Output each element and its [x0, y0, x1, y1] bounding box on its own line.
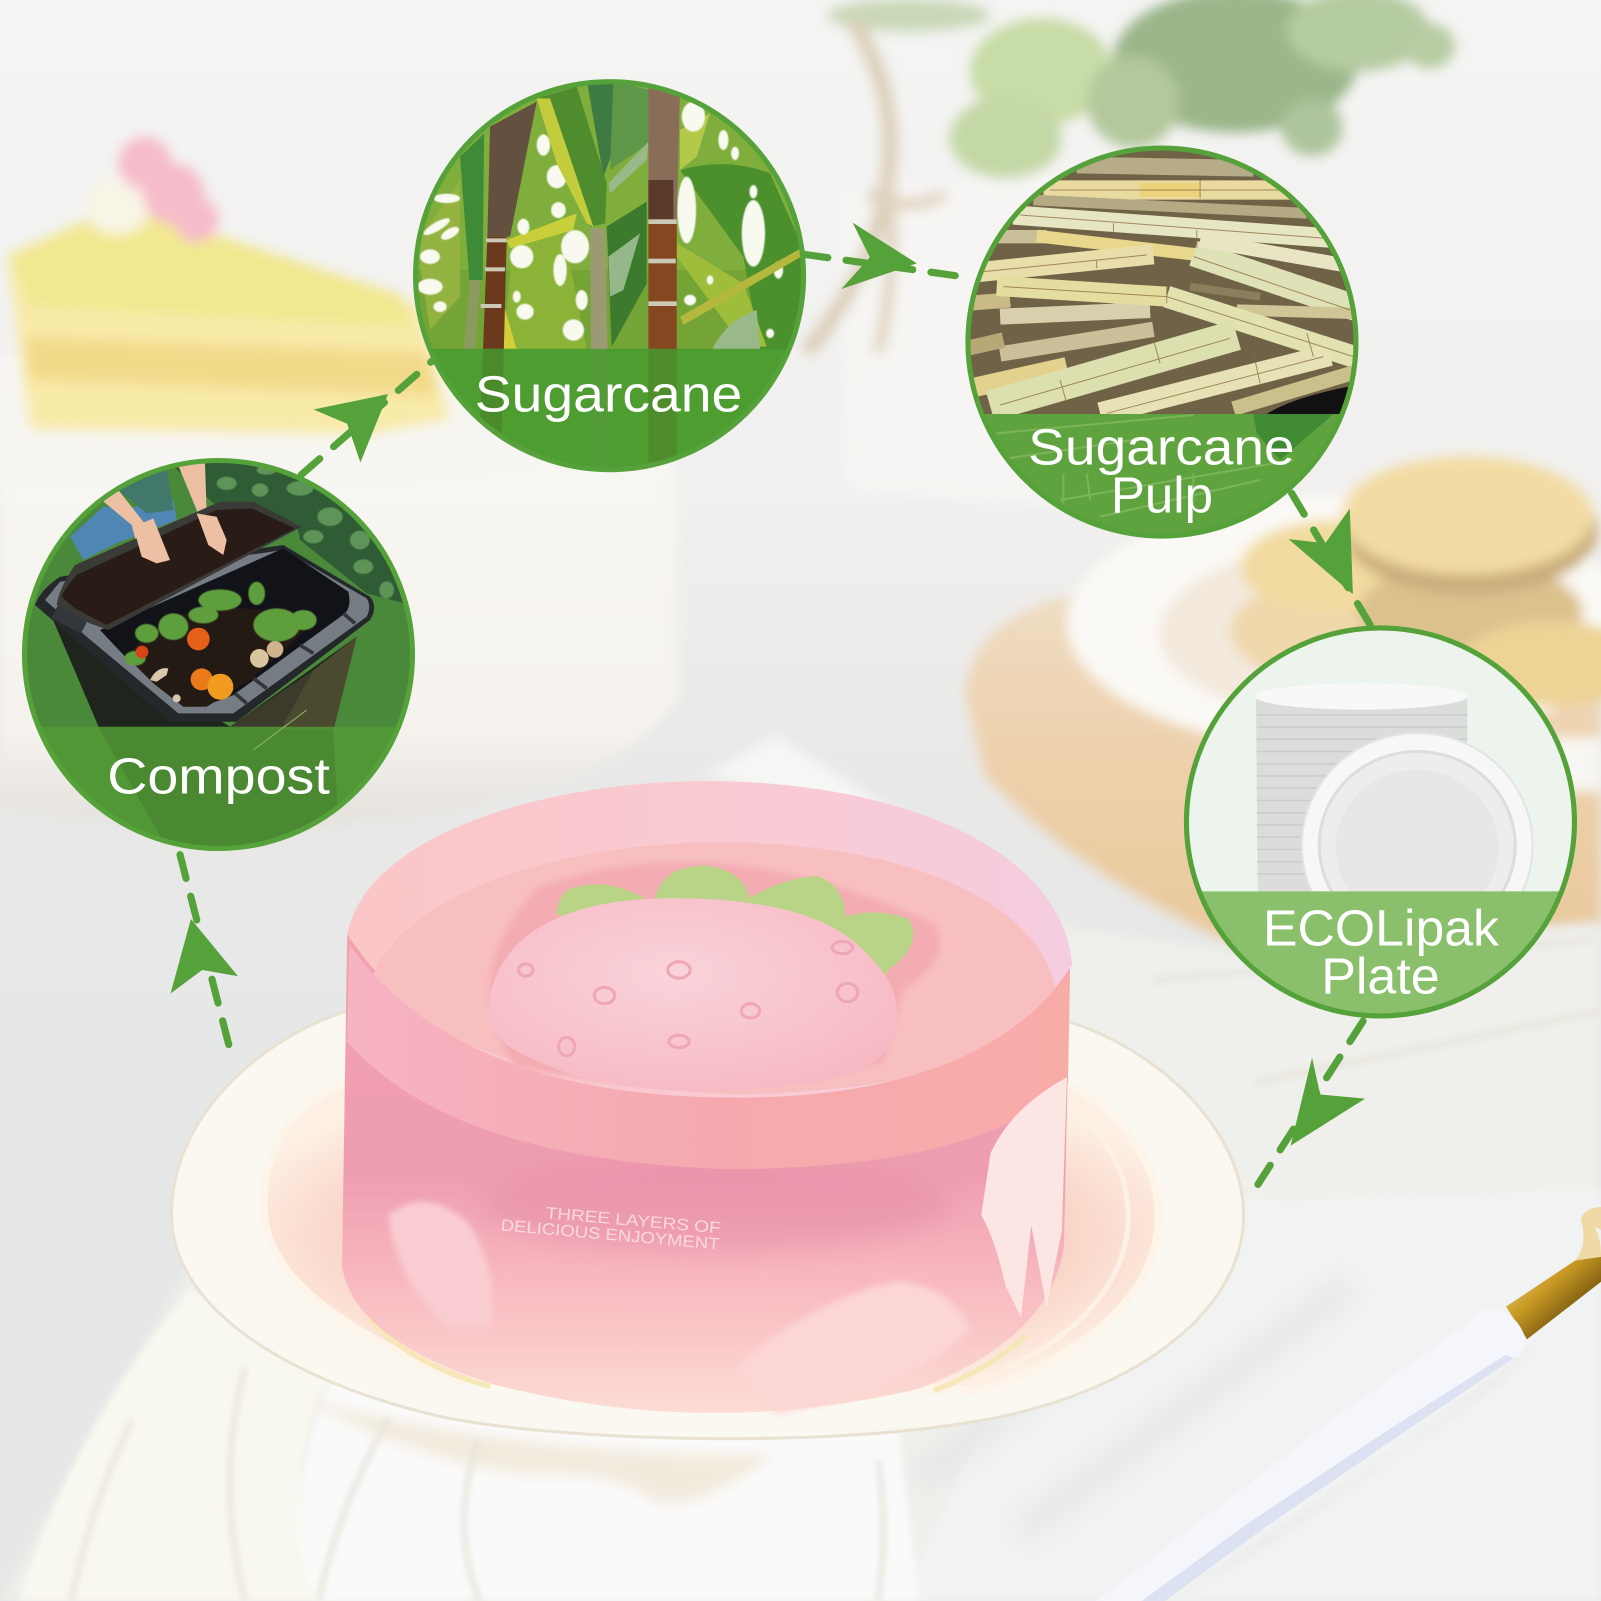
panel: sugarcane — [407, 67, 817, 482]
strawberry leaves — [556, 866, 913, 988]
wrap: cloud prints — [388, 1202, 493, 1327]
compost: vegetables — [127, 607, 313, 707]
arrow: plate to table — [1258, 1021, 1365, 1184]
background: layered yellow cake slice — [8, 137, 449, 434]
yellow cake edge — [368, 1317, 1026, 1391]
wrap: lower band shading — [347, 944, 1070, 1169]
background: plant and twine — [807, 0, 1455, 511]
background: white cloth and folds — [0, 735, 1601, 1601]
wrap: printed text: DELICIOUS ENJOYMENT — [500, 1216, 720, 1253]
panel: sugarcane pulp: Pulp — [1111, 467, 1213, 524]
strawberry — [488, 898, 897, 1091]
panel: ECOLipak plate: Plate — [1321, 947, 1440, 1004]
wrap: printed text — [500, 1204, 721, 1253]
wrap: inner back rim — [347, 781, 1072, 1108]
compost: tray of soil — [57, 502, 302, 630]
background: wooden board, plate and pancakes — [965, 456, 1601, 950]
panel: ECOLipak plate — [1184, 628, 1578, 1024]
panel: sugarcane pulp — [957, 137, 1367, 547]
arrow: table back to compost — [171, 850, 238, 1045]
panel: compost — [17, 447, 427, 860]
arrow: pulp to plate — [1289, 493, 1370, 625]
sugarcane: label: Sugarcane — [475, 365, 742, 422]
pen: gold nib — [1506, 1255, 1601, 1339]
plate: stack of plates — [1256, 687, 1467, 899]
white pen with gold nib — [1096, 1207, 1601, 1601]
pulp: label band — [984, 414, 1340, 534]
strawberry seeds — [519, 941, 858, 1056]
pulp: fibrous stalks — [967, 165, 1360, 413]
plate: label band — [1202, 891, 1559, 1014]
compost: label: Compost — [107, 747, 330, 804]
compost: label band — [42, 726, 396, 846]
pulp: fibre lines and nodes — [983, 180, 1353, 413]
sugarcane: label band — [432, 348, 786, 468]
sugarcane: left blade and stalks — [460, 133, 484, 280]
plate: label: ECOLipak — [1263, 899, 1499, 956]
pulp: shadowed gaps — [970, 150, 1354, 414]
arrow: sugarcane to pulp — [804, 223, 970, 289]
compost: grass — [27, 468, 410, 837]
sugarcane: blades — [588, 84, 614, 175]
compost: hands — [133, 518, 170, 563]
sugarcane: foliage base — [418, 86, 796, 467]
compost: bin body — [52, 617, 357, 853]
background: stack of white plates — [0, 347, 679, 825]
sponge layer — [370, 842, 1058, 1095]
sugarcane: bokeh highlights — [417, 102, 783, 341]
plate: single plate — [1301, 734, 1534, 892]
wrap: body — [342, 934, 1070, 1413]
compost: hedge — [176, 463, 403, 603]
strawberry cake in pink wrap — [342, 781, 1072, 1414]
wrap: white drip print — [981, 1077, 1067, 1317]
wrap: printed text: THREE LAYERS OF — [545, 1204, 721, 1237]
compost: person — [70, 500, 177, 560]
arrow: compost to sugarcane — [301, 359, 434, 475]
pen: body — [1096, 1308, 1525, 1601]
pulp: label: Sugarcane — [1028, 419, 1295, 476]
compost: bin rim — [35, 545, 374, 722]
paper plate under cake — [172, 1011, 1244, 1439]
